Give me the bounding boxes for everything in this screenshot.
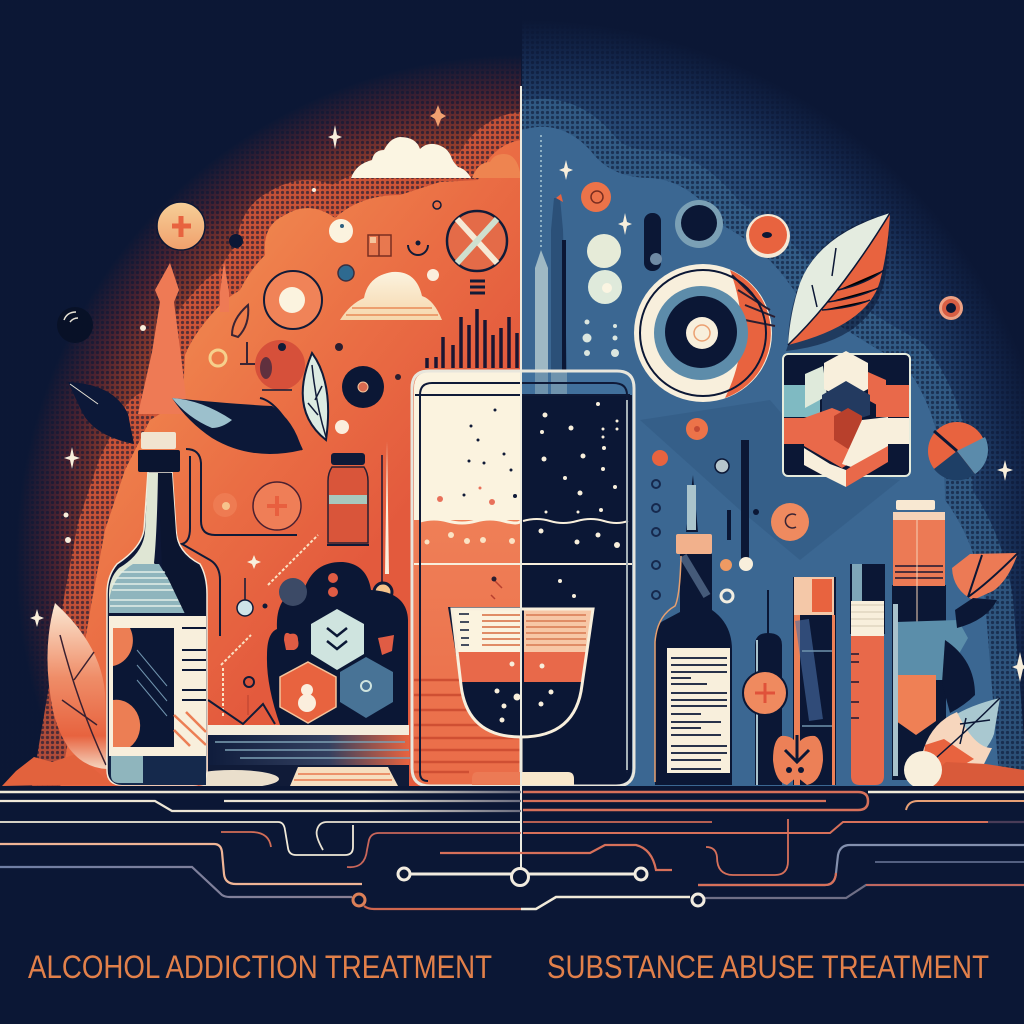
tabletop [208, 725, 410, 786]
icon: small leaf outline [232, 305, 248, 337]
mid dots and rod [652, 418, 809, 602]
icon: small ring [939, 296, 963, 320]
icon: cream dot [335, 420, 349, 434]
leaf: large bottom left [47, 603, 107, 769]
icon: plus badge [157, 202, 205, 250]
leaf: pale [303, 353, 328, 440]
cloud lower [340, 272, 442, 320]
silhouette: distant spires [138, 262, 229, 414]
dark vial with plus [743, 590, 787, 785]
leaf: dark [172, 398, 302, 454]
icon: pill discs with circuit line [182, 449, 301, 636]
dashed traces [221, 535, 318, 718]
icon: ring and bar [210, 342, 255, 366]
icon: ring target [264, 271, 322, 329]
icon: orange eye disc [746, 214, 790, 258]
icon: medicine vial [327, 453, 369, 545]
panel: substance half dome [522, 0, 1024, 790]
leaf: upper right [786, 213, 890, 351]
icon: thermometer [644, 213, 662, 271]
panel: substance scene [535, 135, 1024, 789]
glass outline [412, 371, 634, 786]
icon: pendant and ring [237, 578, 268, 715]
icon: big lens [634, 264, 775, 402]
icon: isometric cube tile [783, 351, 910, 487]
panel: alcohol scene [2, 137, 521, 788]
dots column [581, 182, 622, 357]
hexagon: orange [280, 662, 336, 723]
connector nodes [353, 868, 704, 906]
leaf: small bottom left [2, 754, 112, 786]
icon: needles [535, 135, 567, 370]
divider lower segment [520, 786, 522, 872]
icon: probe [374, 441, 392, 601]
hexagon: blue [340, 657, 393, 718]
icon: red disc [255, 340, 305, 390]
bottom mask band [0, 786, 1024, 1024]
centre divider [520, 86, 522, 872]
leaf: left dark [68, 382, 134, 444]
hexagon cluster [208, 562, 408, 725]
circuit lines right [440, 792, 1024, 909]
dark bottle [655, 475, 732, 785]
heading: alcohol addiction treatment: ALCOHOL ADDICTION TREATMENT [28, 949, 492, 985]
cloud [351, 137, 471, 178]
icon: segmented pie [928, 422, 988, 480]
icon: organ [773, 735, 823, 785]
wine bottle left [107, 432, 207, 785]
leaf: lower right [904, 698, 1024, 789]
glass panel [412, 371, 634, 787]
drinking glass [448, 607, 595, 785]
tube 3 [892, 500, 975, 780]
circuit lines left [0, 792, 521, 909]
icon: vinyl disc [335, 343, 401, 408]
icon: dark dot [229, 234, 243, 248]
icon: sparkles [30, 105, 1024, 682]
icon: black orb [57, 307, 93, 343]
bar ticks [427, 309, 517, 368]
icon: lens small [675, 200, 723, 248]
tube 1 [793, 577, 836, 785]
icon: crossed circle [447, 211, 507, 293]
icon: small symbols [329, 201, 441, 281]
stones [187, 767, 398, 788]
panel: alcohol half dome [20, 60, 521, 786]
leaf: right [952, 553, 1018, 628]
cloud glow [472, 154, 521, 178]
hexagon: chevrons [311, 609, 364, 670]
tube 2 [850, 564, 885, 785]
